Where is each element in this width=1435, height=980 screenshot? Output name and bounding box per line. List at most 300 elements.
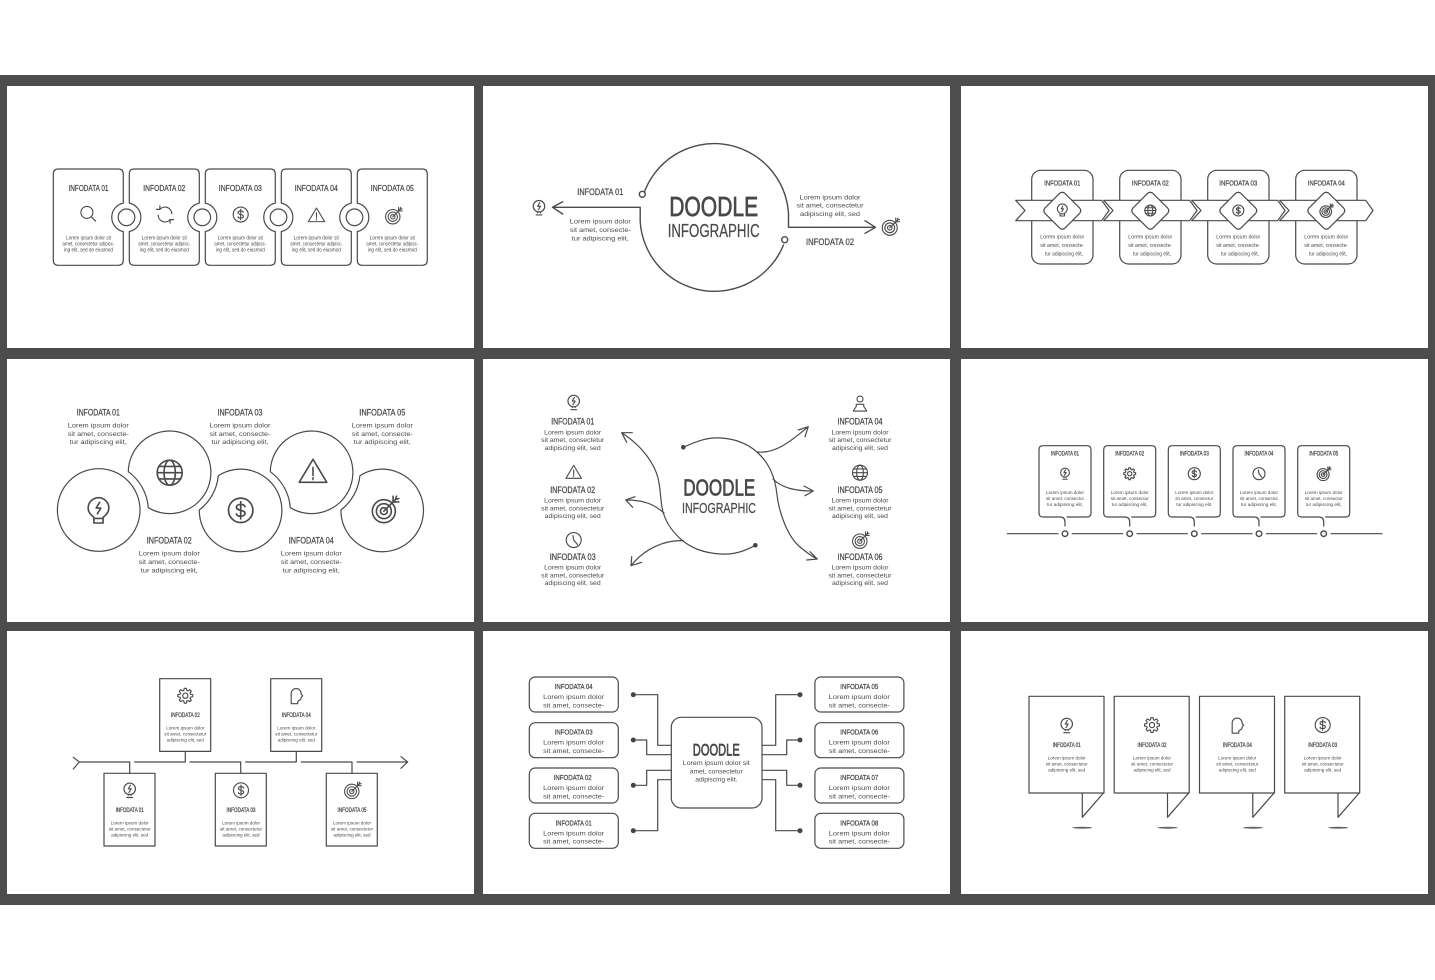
text block 05 [352, 407, 414, 446]
upper curve to lower right arrow [683, 438, 817, 560]
text block 07: sit amet, consecte- [829, 793, 890, 800]
card 03 [215, 773, 266, 846]
text block 01: amet, consectetur adipisc- [62, 242, 115, 248]
circle 01 [57, 469, 140, 551]
text block 06: INFODATA 06 [838, 552, 882, 562]
text block 01: INFODATA 01 [551, 417, 594, 427]
central box [671, 717, 762, 808]
panel: arrow ribbon with diamonds [961, 86, 1428, 348]
text block 02: sit amet, consecte- [1128, 243, 1173, 249]
text block 02: INFODATA 02 [554, 773, 592, 782]
text block 04: sit amet, consectur [1240, 496, 1278, 501]
icon: dollar [1233, 205, 1244, 216]
icon: gear [1124, 468, 1136, 480]
text block 06: adipiscing elit, sed [832, 580, 888, 587]
text block 03: INFODATA 03 [555, 728, 593, 737]
timeline arrow head [357, 757, 408, 768]
text block 04 [543, 682, 605, 709]
card 01 [1039, 446, 1091, 526]
text block 03: Lorem ipsum dolor [1175, 490, 1214, 495]
text block 03: INFODATA 03 [1180, 452, 1209, 458]
text block 02: sit amet, consecte- [543, 793, 604, 800]
central text: DOODLE [693, 740, 740, 760]
text block 04 [1240, 452, 1278, 507]
panel: four speech-note cards [961, 631, 1428, 894]
text block 01 [1046, 452, 1084, 507]
text block 02: INFODATA 02 [147, 535, 192, 545]
text block 05: tur adipiscing elit, [354, 439, 411, 446]
box 03 [529, 723, 618, 758]
text block 03: sit amet, consecte- [210, 431, 270, 438]
text block 02: Lorem ipsum dolor [1128, 234, 1173, 240]
arc with arrow left [552, 202, 784, 291]
icon: target [345, 782, 361, 799]
card 03 [1168, 446, 1220, 526]
icon: globe [852, 465, 868, 480]
icon: target [853, 532, 869, 548]
text block 02: sit amet, consectetur [541, 505, 605, 512]
text block 03: Lorem ipsum dolor [1216, 234, 1261, 240]
box 02 [529, 768, 618, 803]
text block 02: ing elit, sed do eiusmod [140, 248, 189, 254]
icon: clock [1253, 468, 1265, 480]
text block 02: Lorem ipsum dolor [166, 726, 205, 731]
text block 04: INFODATA 04 [555, 682, 593, 691]
card 02 [1120, 170, 1181, 264]
text block 02: Lorem ipsum dolor [1111, 490, 1149, 495]
note card 03 [1285, 696, 1360, 817]
box 01 [529, 813, 618, 848]
text block 04 [1216, 743, 1259, 772]
text block 01: sit amet, consectetur [541, 437, 605, 444]
text block 04: sit amet, consectetur [275, 732, 318, 737]
text block 04: amet, consectetur adipisc- [290, 242, 343, 248]
text block 03 [210, 407, 271, 446]
text block 04: tur adipiscing elit, [283, 567, 340, 574]
text block 03 [1175, 452, 1214, 507]
text block 04: INFODATA 04 [282, 713, 311, 719]
text block 03: tur adipiscing elit, [1176, 502, 1212, 507]
text block 05: Lorem ipsum dolor [832, 498, 889, 505]
text block 05: adipiscing elit, sed [334, 832, 371, 837]
connector dots [631, 692, 802, 833]
icon: target [372, 496, 399, 523]
text block 03: Lorem ipsum dolor [210, 422, 271, 429]
icon: refresh [156, 206, 174, 223]
text block 04 [828, 417, 892, 452]
text block 02: INFODATA 02 [143, 183, 186, 193]
text block 04: tur adipiscing elit, [1309, 252, 1347, 258]
icon: dollar [234, 783, 248, 798]
card 01 [1032, 170, 1093, 264]
text block 04: Lorem ipsum dolor [1304, 234, 1349, 240]
text block 07: INFODATA 07 [840, 773, 878, 782]
timeline arrow tail [73, 757, 130, 773]
text block 02: tur adipiscing elit, [1133, 252, 1171, 258]
text block 01: INFODATA 01 [1051, 452, 1079, 458]
icon: globe [1145, 205, 1156, 216]
icon: target [386, 207, 402, 224]
icon: warning [299, 459, 327, 482]
icon: bulb [88, 498, 109, 523]
ribbon arrow 2 [1104, 200, 1197, 221]
icon: globe [157, 460, 182, 485]
text block 05: INFODATA 05 [838, 485, 882, 495]
box 07 [815, 768, 904, 803]
icon: head [1232, 718, 1244, 733]
icon: person [853, 396, 867, 411]
text block 04: adipiscing elit, sed [832, 445, 888, 452]
circle 02 [128, 431, 211, 514]
text block 01: adipiscing elit, sed [1048, 767, 1086, 772]
text block 02 [1128, 179, 1173, 258]
text block 04: Lorem ipsum dolor [543, 694, 605, 701]
text block 03: sit amet, consectetur [1302, 761, 1344, 766]
text block 02: INFODATA 02 [1115, 452, 1145, 458]
text block 06: sit amet, consecte- [829, 748, 890, 755]
panel: central box with eight branches [483, 631, 950, 894]
diamond 1 [1044, 192, 1081, 229]
text block 05 [1305, 452, 1343, 507]
card 02 [129, 169, 199, 265]
icon: bulb [1061, 718, 1072, 733]
text block 01: Lorem ipsum dolor [543, 830, 605, 837]
text block 03: sit amet, consecte- [543, 748, 604, 755]
text block 01: INFODATA 01 [1044, 179, 1080, 188]
title: DOODLE [683, 474, 755, 500]
panel: timeline with five cards [961, 359, 1428, 622]
title: DOODLE [669, 191, 758, 222]
card 04 [281, 169, 351, 265]
panel: interlocking circles [7, 359, 474, 622]
circle 03 [199, 469, 282, 552]
text block 01: INFODATA 01 [577, 187, 623, 198]
text block 01: Lorem ipsum dolor [570, 219, 632, 226]
text block 03: tur adipiscing elit, [212, 439, 269, 446]
box 08 [815, 813, 904, 848]
text block 02: Lorem ipsum dolor [544, 498, 602, 505]
text block 05: Lorem ipsum dolor [1305, 490, 1343, 495]
text block 02: tur adipiscing elit, [141, 567, 198, 574]
text block 04: INFODATA 04 [1308, 179, 1345, 188]
text block 02: Lorem ipsum dolor [543, 785, 605, 792]
text block 04: Lorem ipsum dolor [1240, 490, 1278, 495]
text block 03: Lorem ipsum dolor [543, 740, 605, 747]
text block 02 [138, 183, 191, 254]
text block 05: Lorem ipsum dolor [352, 422, 414, 429]
right connectors [762, 695, 800, 831]
text block 02: INFODATA 02 [1138, 743, 1167, 749]
text block 01: Lorem ipsum dolor [68, 422, 130, 429]
text block 03: sit amet, consectetur [220, 826, 262, 831]
text block 05: ing elit, sed do eiusmod [368, 248, 417, 254]
left connectors [633, 695, 671, 831]
text block 01: ing elit, sed do eiusmod [64, 248, 113, 254]
icon: bulb [533, 200, 545, 215]
central text: Lorem ipsum dolor sit [683, 760, 750, 767]
text block 04: ing elit, sed do eiusmod [292, 248, 341, 254]
text block 05: sit amet, consecte- [352, 431, 413, 438]
text block 04: sit amet, consecte- [281, 559, 342, 566]
card 04 [271, 679, 322, 751]
panel: zig-zag timeline with arrow [7, 631, 474, 894]
card 02 [160, 679, 211, 751]
text block 04: tur adipiscing elit, [1241, 502, 1277, 507]
text block 03: sit amet, consecte- [1216, 243, 1261, 249]
card 05 [326, 773, 377, 846]
text block 02 [796, 194, 864, 248]
icon: bulb [1057, 204, 1067, 216]
diamond 2 [1132, 192, 1169, 229]
text block 04: sit amet, consecte- [543, 702, 604, 709]
text block 01: tur adipiscing elit, [572, 235, 629, 242]
text block 03: INFODATA 03 [219, 183, 262, 193]
icon: target [882, 218, 900, 235]
text block 01: adipiscing elit, sed [111, 832, 149, 837]
text block 01: tur adipiscing elit, [1047, 502, 1083, 507]
arrow middle right [773, 479, 813, 496]
text block 03: sit amet, consectur [1175, 496, 1214, 501]
text block 04: Lorem ipsum dolor [277, 726, 316, 731]
text block 01 [541, 417, 605, 452]
text block 03 [1302, 743, 1344, 772]
arrow upper right [757, 427, 808, 452]
text block 03: Lorem ipsum dolor [1304, 755, 1342, 760]
text block 02: sit amet, consecte- [139, 559, 200, 566]
card 02 [1104, 446, 1156, 526]
central text [683, 740, 750, 784]
text block 01: adipiscing elit, sed [545, 445, 601, 452]
text block 02: INFODATA 02 [550, 485, 595, 495]
text block 04: INFODATA 04 [289, 535, 334, 545]
text block 02 [164, 713, 207, 743]
icon: search [81, 206, 96, 221]
start node right [782, 237, 788, 243]
diamond 3 [1220, 192, 1257, 229]
box 06 [815, 723, 904, 758]
card 03 [205, 169, 275, 265]
lower curve to upper left arrow [622, 433, 755, 554]
icon: head [291, 689, 303, 704]
panel: S-curve with six arrows [483, 359, 950, 622]
timeline nodes [1062, 531, 1326, 536]
text block 06: Lorem ipsum dolor [829, 740, 891, 747]
icon: dollar [233, 207, 248, 222]
text block 02: Lorem ipsum dolor sit [142, 236, 187, 242]
central text: adipiscing elit. [695, 777, 737, 784]
text block 02 [139, 535, 201, 574]
text block 05: INFODATA 05 [338, 808, 367, 814]
text block 03: Lorem ipsum dolor [544, 565, 602, 572]
text block 01: INFODATA 01 [77, 407, 120, 417]
text block 03: INFODATA 03 [550, 552, 596, 562]
text block 01 [109, 808, 151, 837]
text block 04 [281, 535, 343, 574]
text block 01 [1046, 743, 1088, 772]
text block 05: INFODATA 05 [371, 183, 414, 193]
text block 05: amet, consectetur adipisc- [366, 242, 419, 248]
text block 04 [1304, 179, 1349, 258]
text block 07 [829, 773, 891, 800]
start node left [639, 191, 645, 197]
text block 02: sit amet, consectetur [796, 203, 864, 210]
icon: dollar [1315, 718, 1330, 732]
card 05 [1298, 446, 1350, 526]
text block 03: Lorem ipsum dolor sit [218, 236, 263, 242]
text block 03 [541, 552, 605, 587]
text block 01: sit amet, consecte- [1040, 243, 1085, 249]
text block 05: sit amet, consectetur [331, 826, 373, 831]
text block 03: INFODATA 03 [218, 407, 262, 417]
text block 01: tur adipiscing elit, [70, 439, 127, 446]
text block 05: sit amet, consecte- [829, 702, 890, 709]
text block 04: Lorem ipsum dolor [832, 429, 889, 436]
text block 02: sit amet, consectetur [1131, 761, 1173, 766]
text block 06 [828, 552, 892, 587]
icon: warning [566, 465, 582, 478]
dot bottom [753, 543, 758, 548]
text block 04: sit amet, consectetur [828, 437, 892, 444]
text block 01: sit amet, consectetur [109, 826, 151, 831]
icon: bulb [1061, 468, 1069, 479]
text block 05: INFODATA 05 [840, 682, 878, 691]
text block 03 [220, 808, 262, 837]
text block 02: sit amet, consectetur [164, 732, 207, 737]
text block 05: adipiscing elit, sed [832, 513, 888, 520]
text block 08: Lorem ipsum dolor [829, 830, 891, 837]
arrow lower left [631, 541, 683, 566]
icon: clock [566, 532, 581, 548]
text block 06: sit amet, consectetur [828, 572, 892, 579]
text block 01: sit amet, consecte- [543, 839, 604, 846]
card 01 [104, 773, 155, 846]
text block 08: INFODATA 08 [840, 818, 878, 827]
text block 03: INFODATA 03 [1308, 743, 1338, 749]
text block 01 [62, 183, 115, 254]
text block 06: Lorem ipsum dolor [832, 565, 889, 572]
text block 04: adipiscing elit, sed [278, 738, 315, 743]
icon: dollar [228, 498, 253, 522]
text block 02: adipiscing elit, sed [800, 211, 860, 218]
panel: five notched cards [7, 86, 474, 348]
text block 05: tur adipiscing elit, [1306, 502, 1342, 507]
text block 08 [829, 818, 891, 846]
text block 06: INFODATA 06 [840, 728, 878, 737]
text block 02 [1131, 743, 1173, 772]
icon: gear [1145, 718, 1159, 732]
circle 04 [270, 431, 353, 514]
text block 03: amet, consectetur adipisc- [214, 242, 267, 248]
text block 01 [68, 407, 130, 446]
shadows [1072, 827, 1348, 829]
text block 04: INFODATA 04 [1244, 452, 1274, 458]
text block 04: Lorem ipsum dolor [1218, 755, 1257, 760]
text block 02: adipiscing elit, sed [167, 738, 204, 743]
text block 02: Lorem ipsum dolor [139, 551, 201, 558]
text block 03: adipiscing elit, sed [222, 832, 260, 837]
title [682, 474, 756, 517]
panel: doodle circle with two arrows [483, 86, 950, 348]
text block 01 [1040, 179, 1085, 258]
text block 02: sit amet, consectur [1111, 496, 1149, 501]
text block 02: INFODATA 02 [1132, 179, 1169, 188]
text block 01: sit amet, consecte- [68, 431, 129, 438]
text block 04: INFODATA 04 [295, 183, 338, 193]
text block 04: sit amet, consectetur [1216, 761, 1259, 766]
text block 04 [290, 183, 343, 254]
text block 02 [541, 485, 605, 520]
text block 02 [543, 773, 605, 800]
text block 02: INFODATA 02 [171, 713, 200, 719]
text block 03 [214, 183, 267, 254]
text block 03: adipiscing elit, sed [1304, 767, 1342, 772]
text block 04: INFODATA 04 [838, 417, 882, 427]
text block 01: Lorem ipsum dolor [1046, 490, 1084, 495]
circle 05 [341, 469, 423, 552]
title: INFOGRAPHIC [668, 221, 760, 241]
card 04 [1296, 170, 1357, 264]
icon: bulb [568, 395, 579, 410]
text block 01: INFODATA 01 [116, 808, 144, 814]
arrow middle left [626, 497, 664, 513]
text block 05 [366, 183, 419, 254]
text block 01: tur adipiscing elit, [1045, 252, 1083, 258]
text block 04: adipiscing elit, sed [1219, 767, 1256, 772]
note card 04 [1200, 696, 1274, 817]
title [668, 191, 760, 241]
text block 03: adipiscing elit, sed [545, 580, 601, 587]
text block 01: INFODATA 01 [556, 818, 592, 827]
icon: gear [178, 688, 193, 703]
text block 02: Lorem ipsum dolor [800, 194, 861, 201]
text block 03: INFODATA 03 [226, 808, 256, 814]
text block 03 [1216, 179, 1261, 258]
central text: amet, consectetur [690, 768, 744, 775]
text block 01: Lorem ipsum dolor [111, 820, 149, 825]
arc with arrow right [644, 144, 876, 233]
text block 04: Lorem ipsum dolor sit [294, 236, 339, 242]
box 05 [815, 677, 904, 712]
icon: target [1317, 467, 1331, 481]
text block 04: sit amet, consecte- [1304, 243, 1349, 249]
text block 07: Lorem ipsum dolor [829, 785, 891, 792]
text block 05: sit amet, consectur [1305, 496, 1343, 501]
text block 01: Lorem ipsum dolor [1040, 234, 1085, 240]
timeline [1007, 533, 1382, 535]
icon: target [1320, 204, 1333, 217]
text block 05 [829, 682, 891, 709]
text block 05: Lorem ipsum dolor [829, 694, 891, 701]
text block 04 [275, 713, 318, 743]
connector circles [118, 209, 363, 226]
note card 01 [1029, 696, 1104, 817]
icon: bulb [124, 783, 135, 798]
text block 03 [543, 728, 605, 755]
text block 03: INFODATA 03 [1219, 179, 1257, 188]
timeline segments [135, 751, 352, 773]
text block 01: INFODATA 01 [68, 183, 109, 193]
text block 04: INFODATA 04 [1223, 743, 1252, 749]
text block 05: INFODATA 05 [359, 407, 405, 417]
text block 01 [570, 187, 632, 242]
text block 01: INFODATA 01 [1053, 743, 1081, 749]
card 04 [1233, 446, 1285, 526]
text block 03: Lorem ipsum dolor [222, 820, 260, 825]
card 03 [1208, 170, 1269, 264]
text block 01 [543, 818, 605, 846]
text block 03: tur adipiscing elit, [1221, 252, 1259, 258]
text block 03: sit amet, consectetur [541, 572, 605, 579]
